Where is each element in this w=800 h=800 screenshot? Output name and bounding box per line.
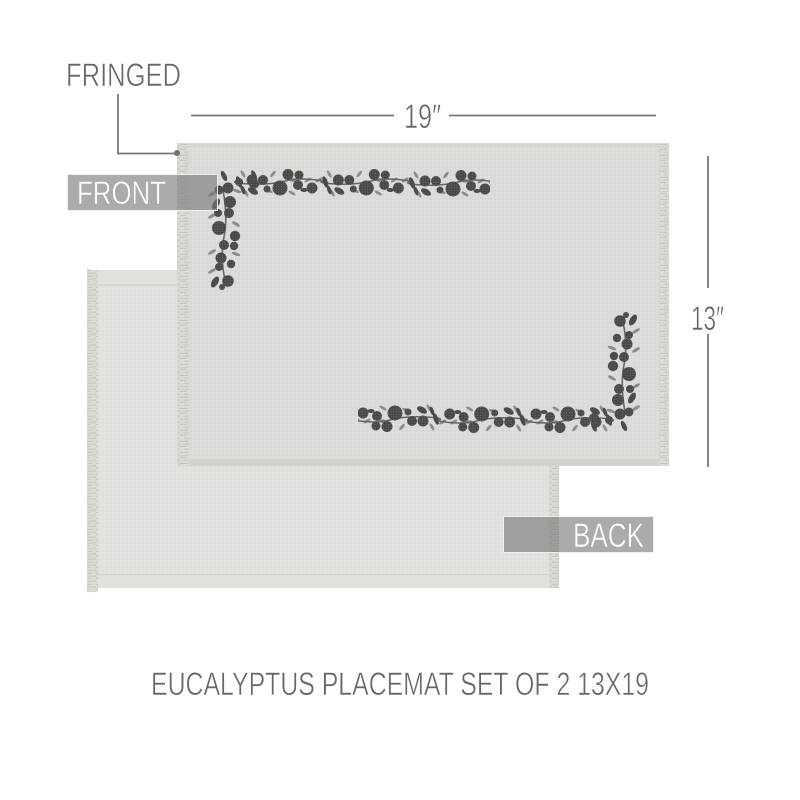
callout: fringed leader line (118, 94, 180, 156)
back placemat left fringe (87, 270, 98, 592)
panel: front placemat (177, 143, 669, 466)
panel: back placemat (87, 268, 559, 593)
label: back: BACK (573, 517, 644, 555)
height dimension: 13 inches: 13″ (691, 300, 724, 338)
callout: fringed label: FRINGED (66, 57, 181, 93)
label: front: FRONT (77, 175, 166, 211)
floral garland bottom right (352, 312, 641, 433)
title: EUCALYPTUS PLACEMAT SET OF 2 13X19 (151, 666, 649, 702)
label: back (504, 516, 654, 555)
front placemat top hem (178, 143, 669, 147)
floral garland top left (207, 169, 496, 290)
width dimension: 19 inches: 19″ (404, 98, 441, 136)
